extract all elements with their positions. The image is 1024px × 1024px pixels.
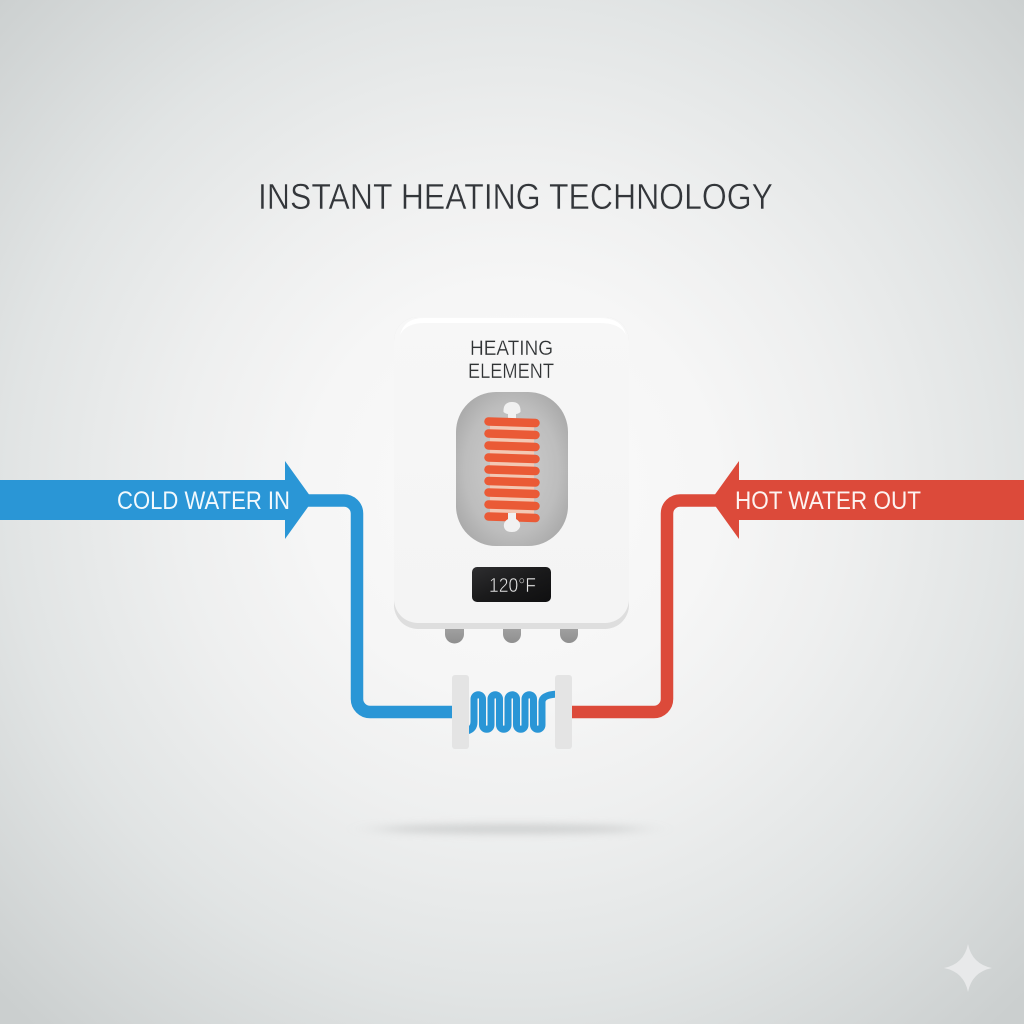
label: cold water in: COLD WATER IN — [117, 487, 290, 515]
title: INSTANT HEATING TECHNOLOGY — [258, 176, 773, 217]
label: heating element: ELEMENT — [468, 360, 554, 383]
hot water arrow and pipe — [572, 461, 1024, 712]
bottom terminal — [504, 513, 520, 532]
digital display — [472, 567, 551, 602]
icon: sparkle watermark — [944, 944, 992, 992]
coil — [467, 694, 557, 731]
top terminal — [503, 402, 521, 421]
ground shadow — [375, 824, 645, 834]
water heater unit — [394, 317, 629, 644]
flow coil assembly — [452, 675, 572, 749]
label: heating element: HEATING — [470, 337, 553, 360]
cold water arrow and pipe — [0, 461, 452, 712]
heating chamber window — [456, 392, 568, 546]
left flange — [452, 675, 469, 749]
right flange — [555, 675, 572, 749]
label: hot water out: HOT WATER OUT — [735, 487, 921, 515]
unit body — [394, 317, 629, 629]
label: heating element — [468, 337, 554, 383]
heating coil — [488, 422, 536, 518]
connector feet — [445, 622, 578, 644]
temperature readout: 120°F — [489, 575, 536, 597]
